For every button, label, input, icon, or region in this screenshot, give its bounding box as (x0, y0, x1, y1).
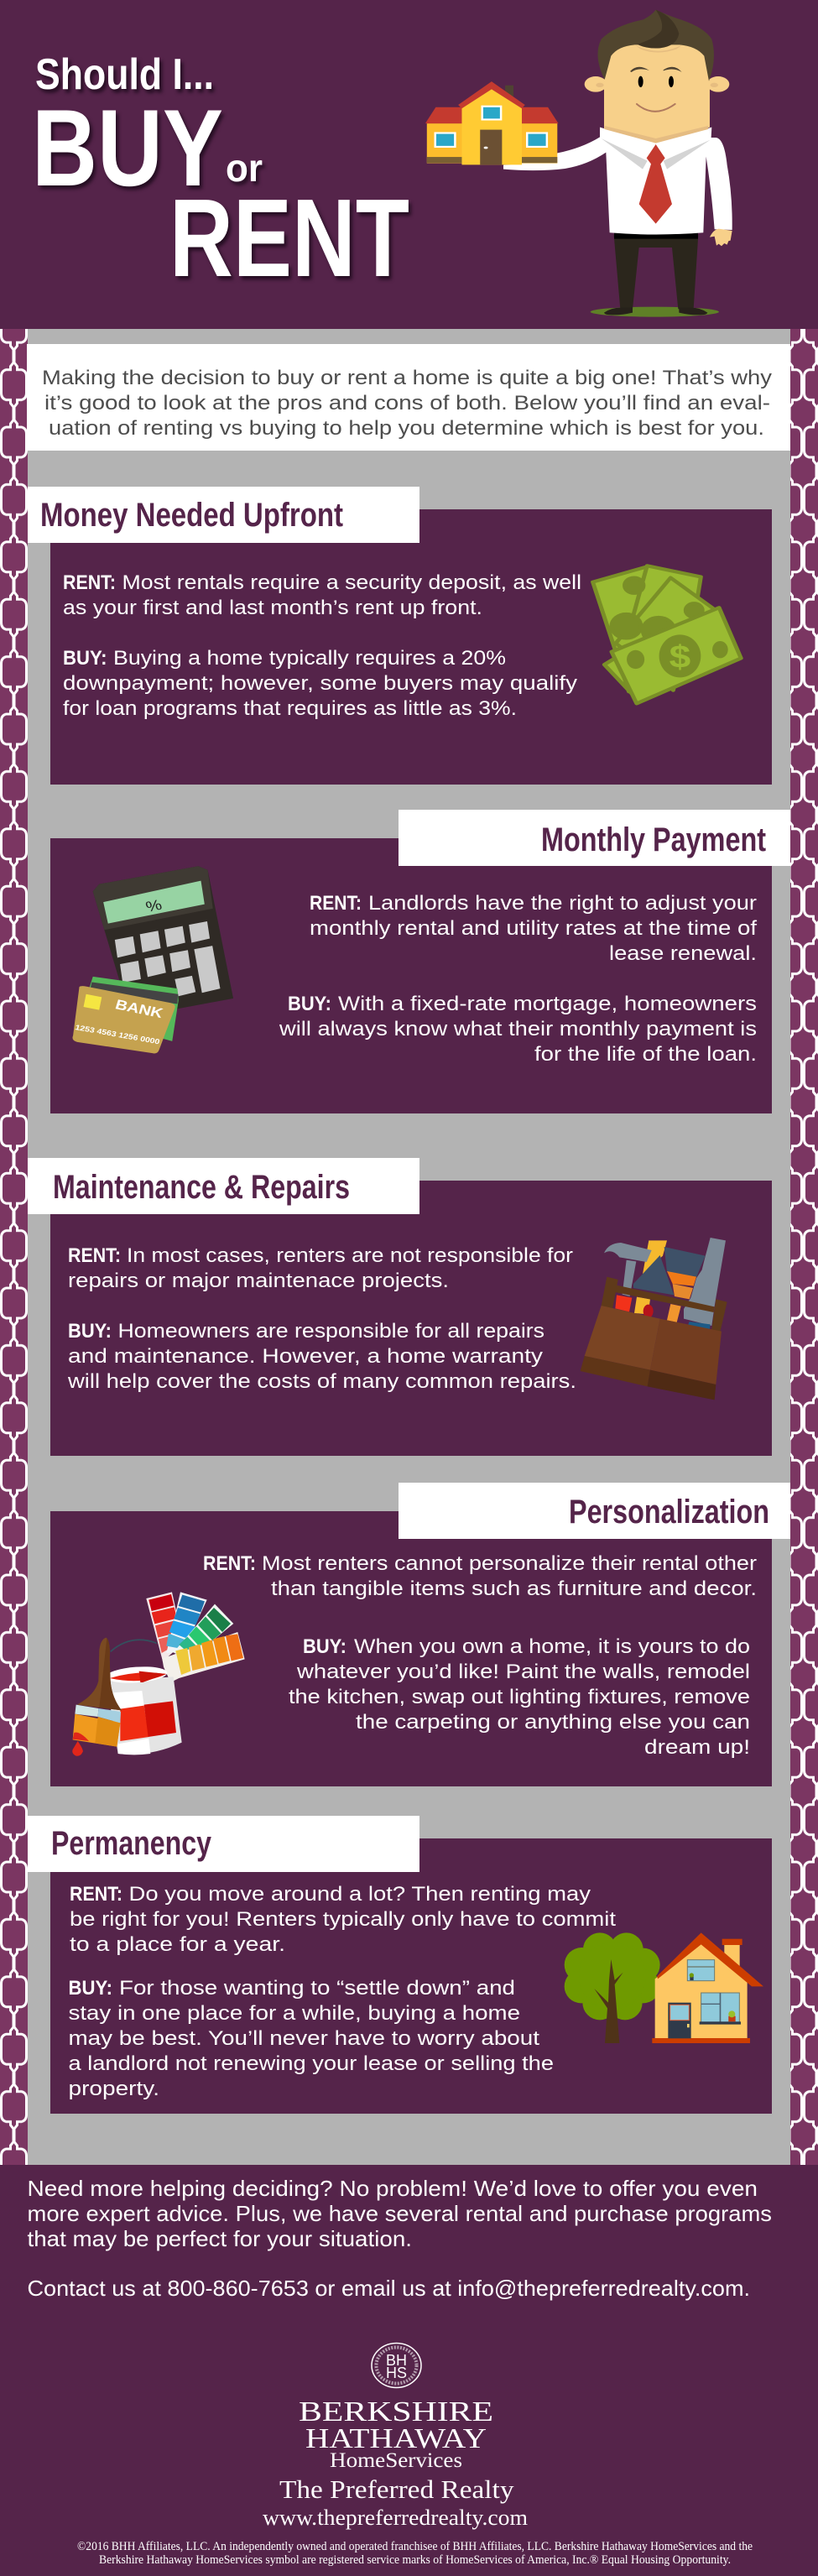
heading: maintenance and repairs: Maintenance & Repairs (53, 1169, 350, 1206)
text: monthly payment: RENT: (310, 892, 362, 915)
text: monthly payment: will always know what their monthly payment is (279, 1018, 757, 1040)
title: Should I... (35, 50, 214, 99)
title (32, 50, 409, 300)
text: money needed upfront (63, 571, 581, 720)
text: personalization: dream up! (644, 1736, 750, 1759)
icon: BHHS seal: BH (386, 2352, 407, 2369)
text: permanency: may be best. You’ll never have to worry about (69, 2027, 539, 2050)
heading: personalization: Personalization (569, 1494, 769, 1530)
panel: permanency (28, 1816, 772, 2114)
text: permanency: For those wanting to “settle down” and (119, 1977, 515, 2000)
text: money needed upfront: downpayment; however, some buyers may qualify (63, 672, 578, 695)
text: permanency (69, 1883, 616, 2100)
text: footer call to action (27, 2176, 772, 2301)
logo: Berkshire Hathaway HomeServices wordmark: BERKSHIRE (299, 2396, 493, 2427)
panel: intro: it’s good to look at the pros and cons of both. Below you’ll find an eval- (44, 392, 770, 415)
heading: monthly payment: Monthly Payment (541, 821, 766, 858)
text: personalization: the kitchen, swap out lighting fixtures, remove (289, 1686, 750, 1708)
text: footer call to action: Need more helping deciding? No problem! We’d love to offer you even (27, 2176, 758, 2201)
text: personalization: BUY: (303, 1635, 346, 1658)
text: legal disclaimer: ©2016 BHH Affiliates, LLC. An independently owned and operated franchisee of BHH Affiliates, LLC. Berkshire Hathaway HomeServices and the (77, 2540, 753, 2553)
text: money needed upfront: RENT: (63, 571, 116, 594)
text: money needed upfront: BUY: (63, 647, 107, 670)
gray content background (28, 329, 790, 2165)
right patterned border (790, 329, 818, 2165)
text: permanency: property. (69, 2078, 159, 2100)
text: footer call to action: that may be perfect for your situation. (27, 2226, 412, 2251)
text: money needed upfront: as your first and last month’s rent up front. (63, 597, 482, 619)
icon: money bills: $ (670, 639, 690, 675)
text: personalization: Most renters cannot personalize their rental other (262, 1552, 757, 1575)
text: personalization: whatever you’d like! Paint the walls, remodel (296, 1661, 750, 1683)
text: maintenance and repairs: RENT: (68, 1244, 121, 1267)
text: permanency: RENT: (70, 1883, 122, 1906)
logo: Berkshire Hathaway HomeServices wordmark: The Preferred Realty (279, 2474, 514, 2504)
text: permanency: a landlord not renewing your lease or selling the (69, 2052, 554, 2075)
title: BUY (32, 86, 223, 209)
text: personalization: the carpeting or anything else you can (356, 1711, 750, 1734)
text: monthly payment (279, 892, 757, 1066)
icon: calculator and credit cards: % (144, 897, 164, 915)
text: maintenance and repairs: Homeowners are responsible for all repairs (117, 1320, 544, 1343)
logo: Berkshire Hathaway HomeServices wordmark: www.thepreferredrealty.com (263, 2506, 528, 2530)
text: monthly payment: Landlords have the right to adjust your (368, 892, 757, 915)
text: maintenance and repairs: In most cases, renters are not responsible for (127, 1244, 573, 1267)
title: or (226, 146, 263, 190)
text: monthly payment: lease renewal. (609, 942, 757, 965)
text: maintenance and repairs (67, 1244, 576, 1393)
icon: calculator and credit cards (72, 866, 233, 1053)
text: money needed upfront: for loan programs that requires as little as 3%. (63, 697, 517, 720)
text: personalization: than tangible items such as furniture and decor. (271, 1577, 757, 1600)
text: footer call to action: more expert advice. Plus, we have several rental and purchase programs (27, 2201, 772, 2226)
text: permanency: stay in one place for a while, buying a home (69, 2002, 520, 2025)
icon: businessman holding house (503, 10, 732, 317)
icon: toolbox (581, 1238, 727, 1400)
text: money needed upfront: Buying a home typically requires a 20% (113, 647, 506, 670)
text: monthly payment: for the life of the loan. (534, 1043, 757, 1066)
icon: BHHS seal (372, 2343, 421, 2388)
text: personalization: RENT: (203, 1552, 256, 1575)
icon: tree and house (565, 1932, 763, 2043)
logo: Berkshire Hathaway HomeServices wordmark (263, 2396, 528, 2530)
icon: calculator and credit cards: BANK (113, 997, 164, 1021)
text: personalization: When you own a home, it is yours to do (354, 1635, 750, 1658)
heading: money needed upfront: Money Needed Upfront (40, 497, 343, 534)
text: maintenance and repairs: will help cover the costs of many common repairs. (67, 1370, 576, 1393)
text: money needed upfront: Most rentals require a security deposit, as well (122, 571, 581, 594)
text: permanency: BUY: (69, 1977, 112, 2000)
panel: intro: uation of renting vs buying to help you determine which is best for you. (49, 417, 764, 440)
text: monthly payment: With a fixed-rate mortgage, homeowners (338, 993, 757, 1015)
text: maintenance and repairs: repairs or major maintenace projects. (68, 1270, 449, 1292)
text: maintenance and repairs: BUY: (68, 1320, 112, 1343)
panel: money needed upfront (28, 487, 772, 785)
text: monthly payment: BUY: (288, 993, 331, 1015)
text: personalization (203, 1552, 757, 1759)
icon: paint can, brush and swatches (72, 1592, 245, 1756)
panel: maintenance and repairs (28, 1158, 772, 1456)
icon: calculator and credit cards: 1253 4563 1256 0000 (74, 1024, 160, 1046)
text: permanency: Do you move around a lot? Then renting may (129, 1883, 591, 1906)
title: RENT (169, 176, 409, 300)
text: maintenance and repairs: and maintenance. However, a home warranty (68, 1345, 544, 1368)
logo: Berkshire Hathaway HomeServices wordmark: HomeServices (330, 2449, 462, 2472)
heading: permanency: Permanency (51, 1825, 212, 1862)
panel: personalization (50, 1483, 790, 1786)
text: monthly payment: monthly rental and utility rates at the time of (310, 917, 757, 940)
text: legal disclaimer: Berkshire Hathaway HomeServices symbol are registered service marks of HomeServices of America, Inc.® Equal Housing Opportunity. (99, 2553, 731, 2567)
panel: intro: Making the decision to buy or rent a home is quite a big one! That’s why (42, 367, 773, 389)
logo: Berkshire Hathaway HomeServices wordmark: HATHAWAY (305, 2423, 487, 2454)
panel: intro (27, 344, 790, 451)
text: permanency: to a place for a year. (70, 1933, 285, 1956)
text: permanency: be right for you! Renters typically only have to commit (70, 1908, 616, 1931)
icon: money bills (593, 566, 741, 703)
icon: BHHS seal: HS (386, 2365, 407, 2381)
text: legal disclaimer (77, 2540, 753, 2567)
text: footer call to action: Contact us at 800-860-7653 or email us at info@thepreferredrealty.com. (27, 2276, 750, 2301)
left patterned border (0, 329, 28, 2165)
icon: yellow house (425, 81, 559, 164)
panel: monthly payment (50, 810, 790, 1113)
